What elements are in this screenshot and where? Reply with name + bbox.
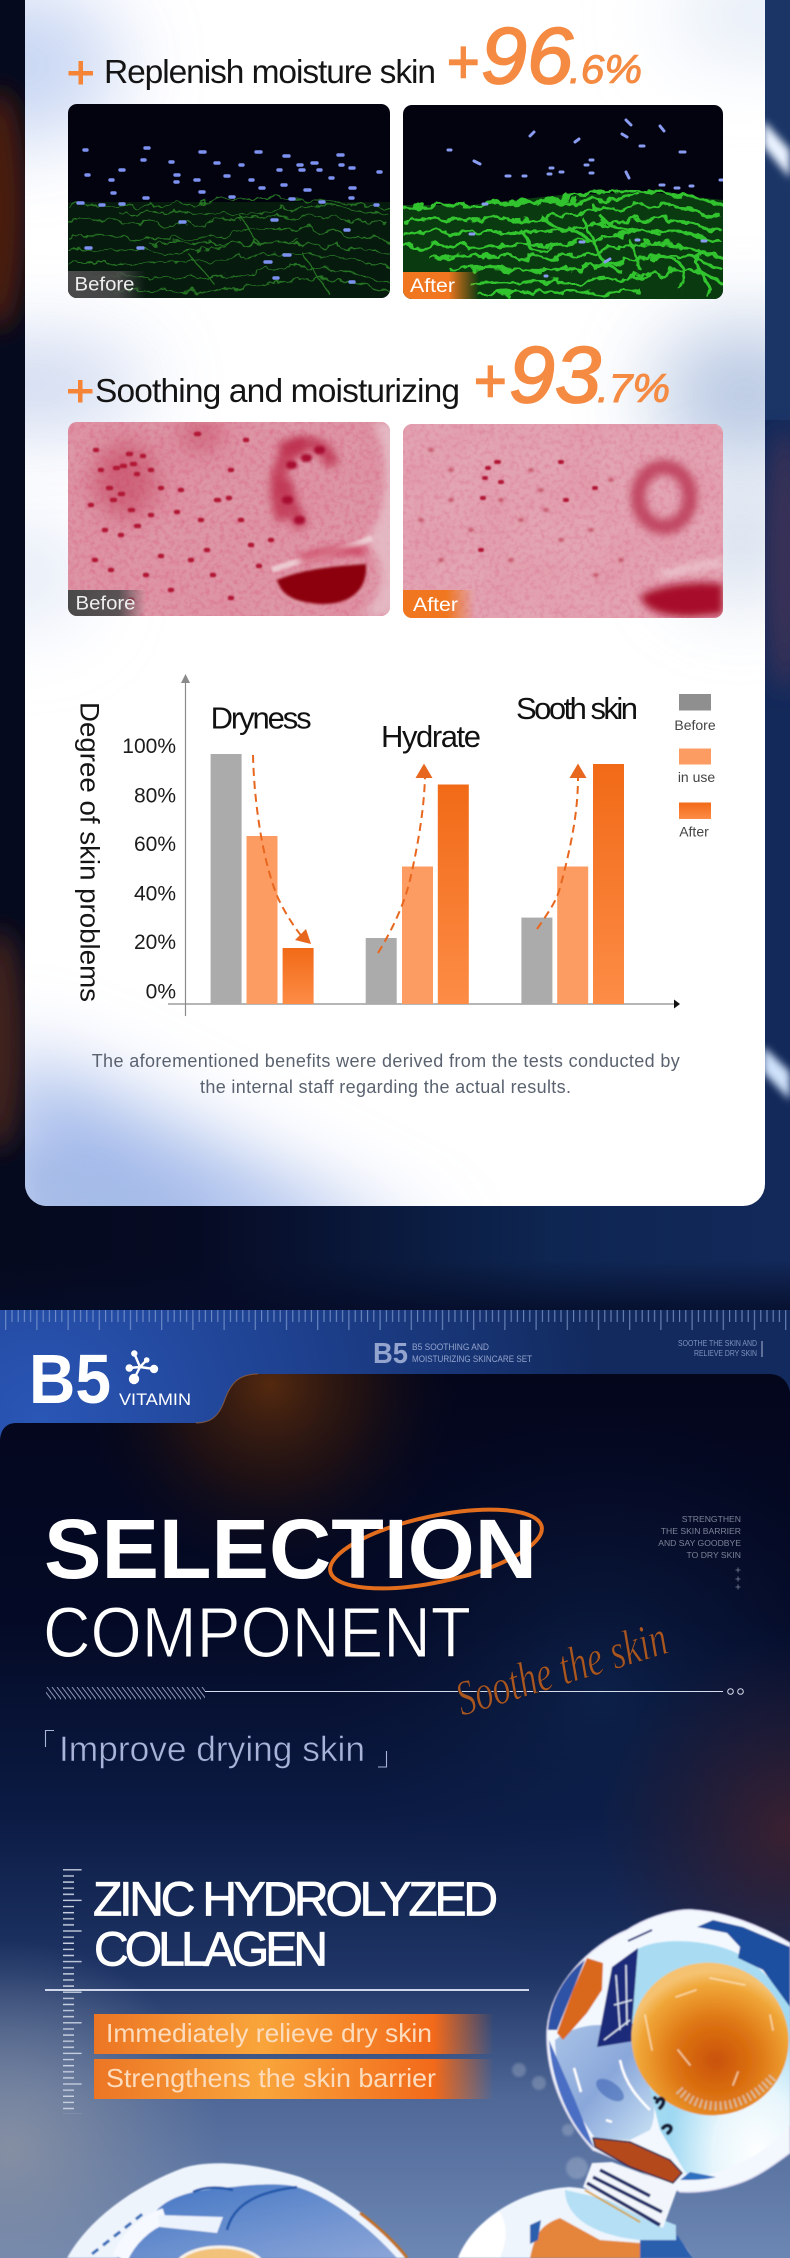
bubbles xyxy=(512,2063,588,2179)
fibre cells xyxy=(448,120,723,276)
left blue rim xyxy=(548,1960,585,2030)
header center mark: B5 SOOTHING AND xyxy=(412,1342,489,1353)
label: moisture after xyxy=(403,272,479,299)
neck xyxy=(583,2162,678,2228)
y axis labels: 40% xyxy=(134,882,176,906)
category labels: Sooth skin xyxy=(516,691,638,726)
header center mark: MOISTURIZING SKINCARE SET xyxy=(412,1354,532,1365)
label: redness after: After xyxy=(413,595,459,616)
script: soothe the skin: Soothe the skin xyxy=(449,1609,674,1727)
title: selection component: COMPONENT xyxy=(43,1594,471,1673)
footnote: the internal staff regarding the actual results. xyxy=(200,1077,571,1097)
legend: Before xyxy=(674,717,716,733)
section heading: replenish moisture: Replenish moisture skin xyxy=(104,54,436,91)
light blue interior xyxy=(630,1941,790,2180)
y axis labels xyxy=(122,735,176,1004)
bar chart: degree of skin problems xyxy=(74,674,716,1016)
white results panel xyxy=(25,0,765,1206)
footnote xyxy=(92,1051,680,1097)
label: redness after xyxy=(403,590,475,618)
glass area xyxy=(555,2025,654,2140)
side note: strengthen: STRENGTHEN xyxy=(682,1514,741,1524)
logo: B5 vitamin: B5 xyxy=(29,1340,111,1418)
logo: B5 vitamin: VITAMIN xyxy=(119,1390,191,1409)
section heading: soothing and moisturizing: .7% xyxy=(597,367,670,411)
divider line with hatch xyxy=(46,1687,743,1702)
benefit bar: skin barrier: Strengthens the skin barrier xyxy=(106,2063,436,2093)
sphere shell xyxy=(547,1910,790,2192)
side note: strengthen: AND SAY GOODBYE xyxy=(658,1538,741,1548)
axes xyxy=(168,674,680,1016)
vertical ruler xyxy=(63,1869,82,2114)
molecule sphere: lower right xyxy=(458,2187,693,2258)
header center mark xyxy=(373,1338,532,1370)
header right note: RELIEVE DRY SKIN xyxy=(694,1348,757,1358)
label: redness before: Before xyxy=(76,594,136,614)
legend: in use xyxy=(678,769,715,785)
brown reflection xyxy=(593,2138,682,2183)
yolk xyxy=(610,1941,790,2137)
arrow: dryness down xyxy=(253,755,311,944)
arrow: sooth skin up xyxy=(537,764,586,929)
section heading: replenish moisture: .6% xyxy=(569,48,642,92)
y axis labels: 100% xyxy=(122,735,176,758)
section heading: soothing and moisturizing: Soothing and moisturizing xyxy=(95,373,460,410)
heading: zinc hydrolyzed collagen: COLLAGEN xyxy=(94,1924,328,1976)
footnote: The aforementioned benefits were derived from the tests conducted by xyxy=(92,1051,680,1071)
molecule sphere: lower left xyxy=(67,2163,407,2258)
label: moisture before: Before xyxy=(74,274,134,296)
section heading: replenish moisture xyxy=(68,11,642,100)
logo: B5 vitamin xyxy=(29,1340,191,1418)
bars: sooth skin xyxy=(521,764,624,1004)
title: selection component: SELECTION xyxy=(44,1502,537,1596)
title: selection component xyxy=(43,1494,549,1673)
subtitle: improve drying skin: Improve drying skin xyxy=(59,1730,365,1769)
heading: zinc hydrolyzed collagen: ZINC HYDROLYZED xyxy=(93,1874,498,1926)
icon: molecule xyxy=(126,1350,158,1384)
side note: strengthen: THE SKIN BARRIER xyxy=(661,1526,741,1536)
icon: plus xyxy=(68,61,93,84)
y axis labels: 20% xyxy=(134,931,176,954)
side note: strengthen xyxy=(658,1514,741,1590)
glass highlights xyxy=(574,2060,650,2122)
section heading: replenish moisture: 96 xyxy=(481,11,574,100)
page background xyxy=(0,0,790,1320)
image: moisture after xyxy=(403,105,723,299)
benefit bar: relieve dry skin: Immediately relieve dry skin xyxy=(106,2018,432,2048)
section heading: replenish moisture: + xyxy=(446,28,479,97)
icon: plus xyxy=(68,380,92,402)
ruler xyxy=(0,1310,790,1330)
section heading: soothing and moisturizing: 93 xyxy=(509,330,601,419)
bars: hydrate xyxy=(366,784,469,1004)
benefit bar: relieve dry skin xyxy=(94,2014,494,2054)
benefit bar: skin barrier xyxy=(94,2059,494,2099)
label: redness before xyxy=(68,590,146,616)
y axis labels: 60% xyxy=(134,833,176,856)
fibre cells xyxy=(78,148,381,282)
y axis title: Degree of skin problems xyxy=(74,702,104,1002)
legend: After xyxy=(679,824,709,840)
header center mark: B5 xyxy=(373,1338,408,1370)
bars: dryness xyxy=(211,754,314,1004)
category labels: Dryness xyxy=(211,700,312,736)
orange ring xyxy=(323,1494,549,1604)
header right note: SOOTHE THE SKIN AND xyxy=(678,1338,757,1348)
heading: zinc hydrolyzed collagen xyxy=(93,1874,498,1976)
dark main section xyxy=(0,1374,790,2258)
section heading: soothing and moisturizing: + xyxy=(473,347,506,416)
molecule sphere: large with yolk xyxy=(547,1910,790,2228)
legend xyxy=(674,694,716,840)
image: skin redness after xyxy=(403,424,723,618)
category labels: Hydrate xyxy=(381,719,481,754)
orange reflection xyxy=(557,1958,603,2040)
label: moisture after: After xyxy=(410,276,456,297)
image: skin redness before xyxy=(68,419,400,616)
header band with ruler xyxy=(0,1310,790,1450)
label: moisture before xyxy=(68,271,146,298)
divider xyxy=(45,1989,529,1991)
side note: strengthen: TO DRY SKIN xyxy=(687,1550,741,1560)
dark blue reflections xyxy=(697,1920,790,2007)
arrow: hydrate up xyxy=(378,764,432,953)
y axis labels: 0% xyxy=(146,980,176,1004)
section heading: soothing and moisturizing xyxy=(68,330,670,419)
header right note xyxy=(678,1338,762,1358)
y axis labels: 80% xyxy=(134,784,176,808)
category labels xyxy=(211,691,638,754)
image: moisture before xyxy=(68,104,390,298)
